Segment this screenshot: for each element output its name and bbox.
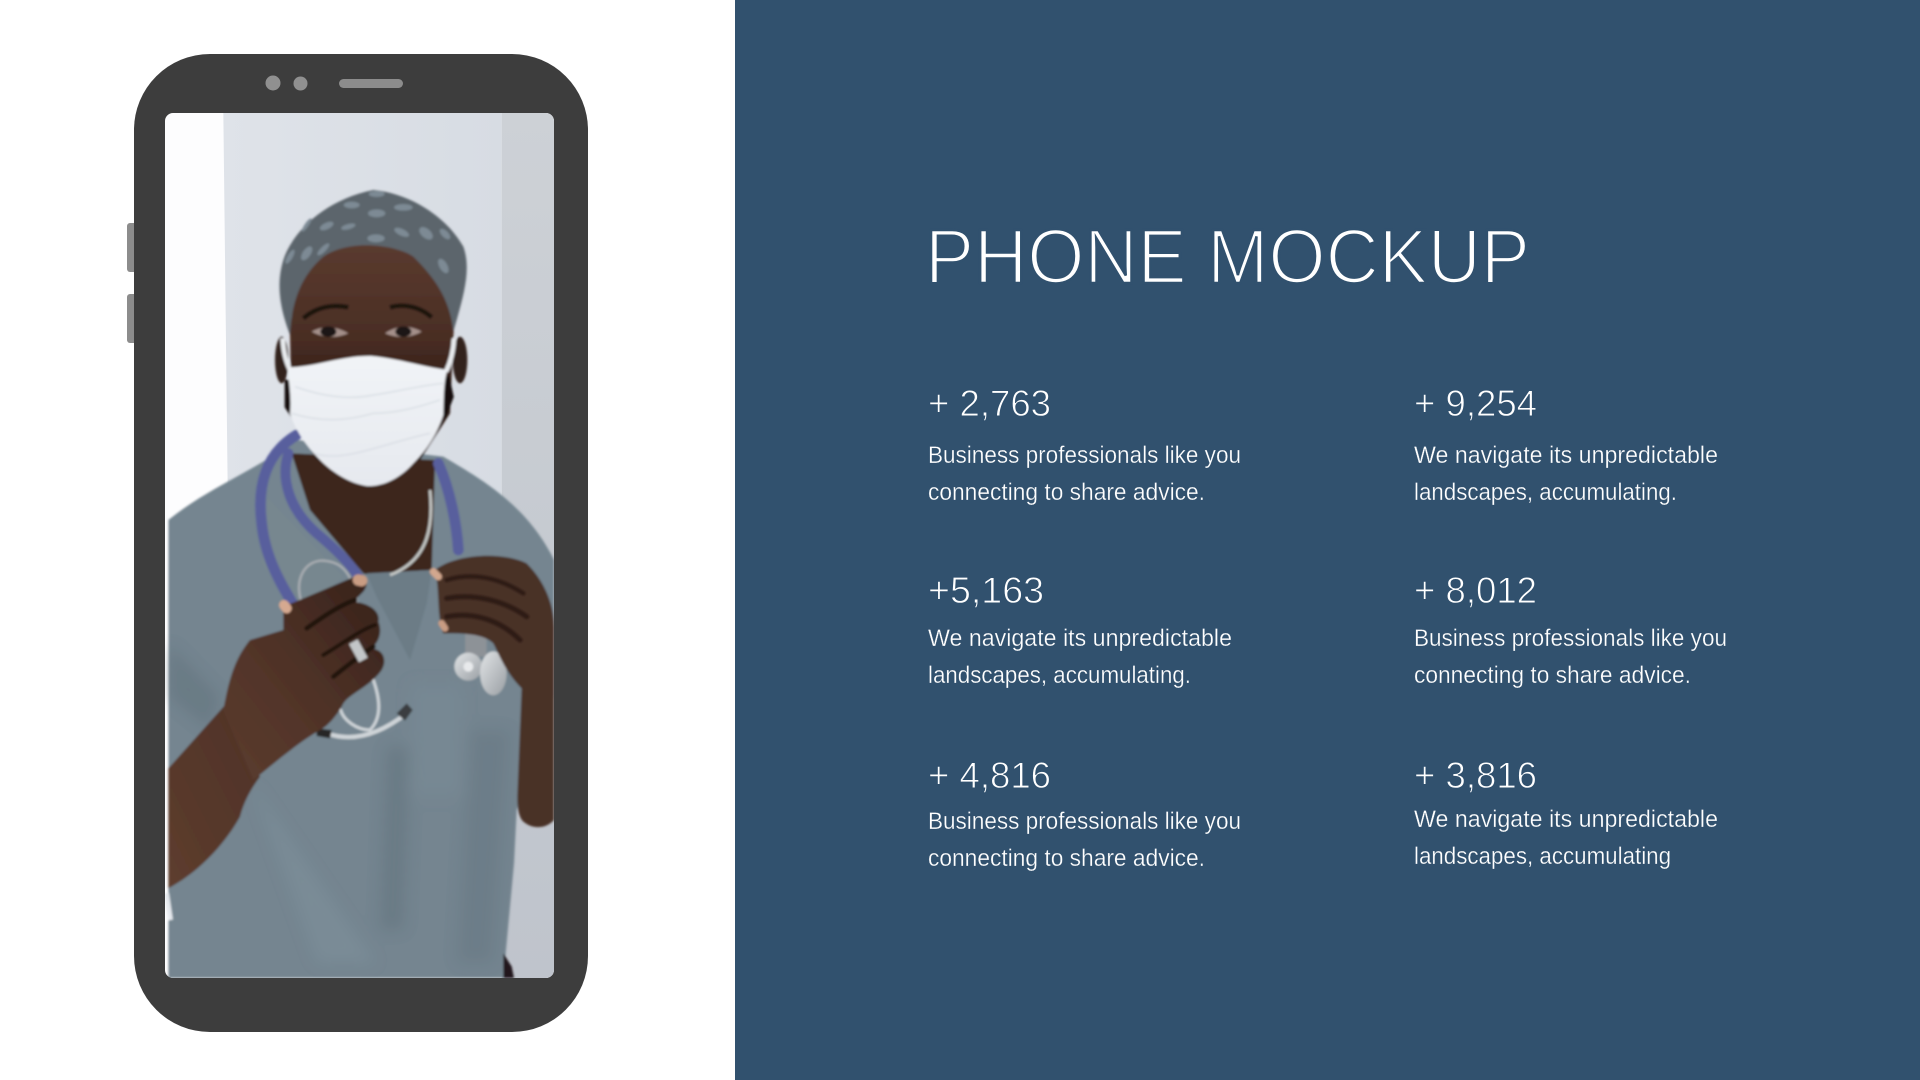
front sensor [294,76,308,90]
description: We navigate its unpredictable [1414,442,1718,469]
finger knuckle [284,605,287,608]
number: +5,163 [928,570,1044,611]
photo: doctor wearing mask and stethoscope [165,113,554,978]
fingertip [358,563,362,598]
scrub collar [367,570,432,660]
shirt shading [168,643,510,963]
side button upper [127,223,139,272]
stethoscope lower loop [327,680,407,737]
description: We navigate its unpredictable [928,625,1232,652]
right arm and hand [435,556,554,827]
title: PHONE MOCKUP [925,214,1530,300]
stethoscope tubes [260,435,458,610]
stat: +5,163 [928,570,1232,689]
scrub top [168,440,554,978]
left forearm [168,705,260,888]
number: + 4,816 [928,755,1051,796]
description line two: connecting to share advice. [928,845,1205,872]
cap dots [284,191,452,275]
description: Business professionals like you [1414,625,1727,652]
number: + 3,816 [1414,755,1537,796]
left hand [223,575,384,780]
beard sides [287,380,293,417]
eyes [312,327,348,337]
stat: + 3,816 [1414,755,1718,870]
description: Business professionals like you [928,442,1241,469]
description line two: connecting to share advice. [1414,662,1691,689]
stethoscope chest piece [454,633,507,695]
description line two: landscapes, accumulating [1414,843,1671,870]
ring [353,642,363,660]
phone body [134,54,588,1032]
left hand finger gaps [307,600,375,677]
right hand finger shadows [447,576,527,640]
description: We navigate its unpredictable [1414,806,1718,833]
necklace [390,490,431,575]
face [289,237,454,460]
stat: + 4,816 [928,755,1241,872]
side button lower [127,294,139,343]
face mask [288,356,447,486]
stat: + 2,763 [928,383,1241,506]
number: + 2,763 [928,383,1051,424]
mask ear loops [283,338,454,372]
speaker [339,79,403,88]
surgical cap [280,190,467,335]
stat: + 8,012 [1414,570,1727,689]
number: + 9,254 [1414,383,1537,424]
phone mockup [127,54,588,1032]
ears [275,337,288,383]
mask folds [294,383,442,444]
number: + 8,012 [1414,570,1537,611]
neck and chest [292,453,435,577]
front camera [266,76,280,90]
description line two: landscapes, accumulating. [1414,479,1677,506]
description: Business professionals like you [928,808,1241,835]
description line two: connecting to share advice. [928,479,1205,506]
background panel [735,0,1920,1080]
eyebrows [303,306,348,318]
stat: + 9,254 [1414,383,1718,506]
description line two: landscapes, accumulating. [928,662,1191,689]
